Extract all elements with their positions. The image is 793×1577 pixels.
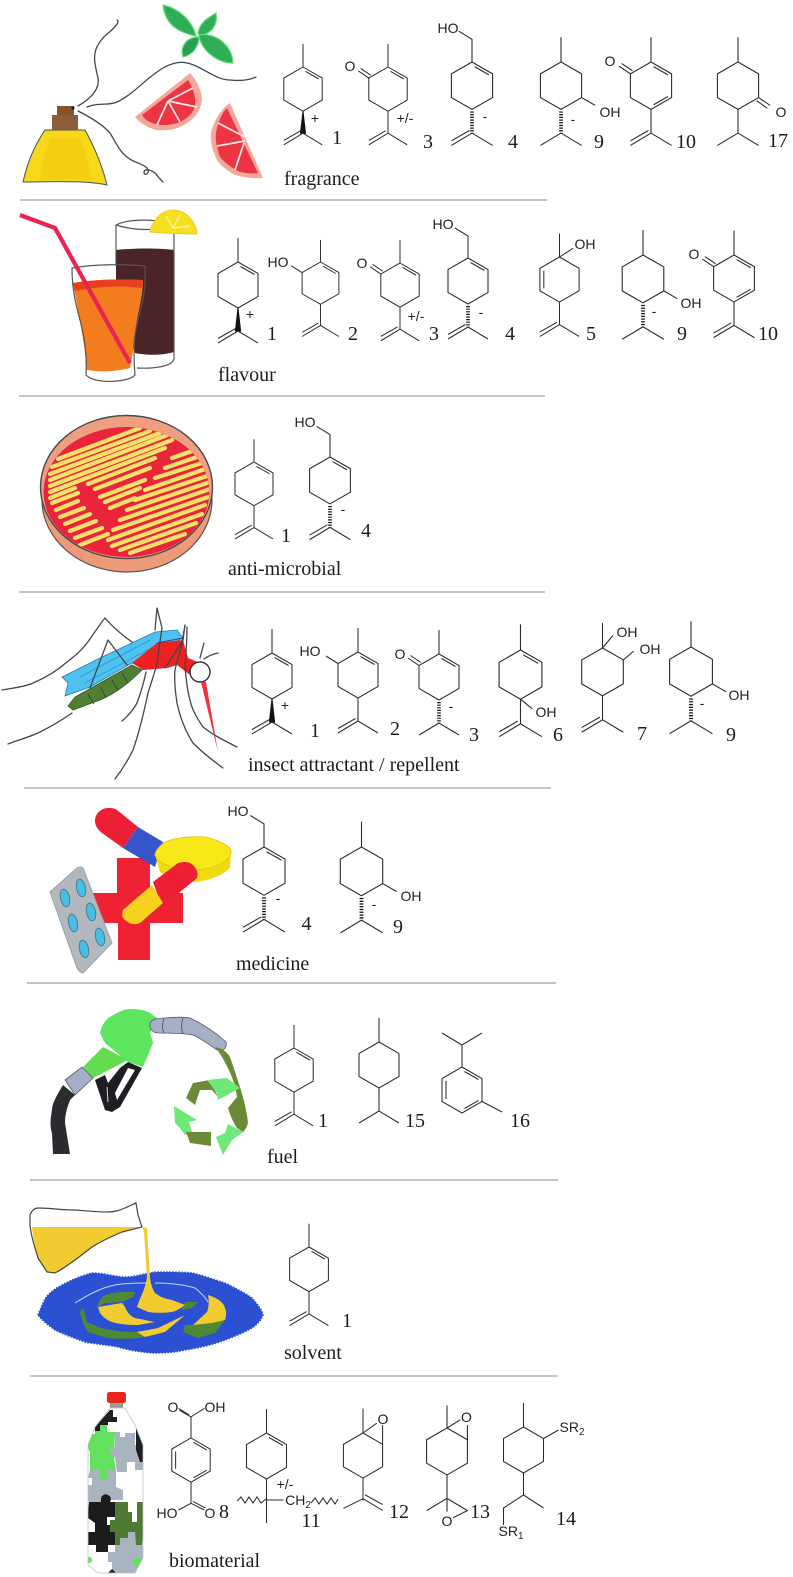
molecule 2: 2: [390, 718, 400, 740]
molecule 14: SR: [559, 1419, 579, 1435]
molecule 4: HO: [432, 216, 454, 232]
molecule 10: 10: [758, 323, 778, 345]
label: medicine: medicine: [236, 953, 309, 975]
molecule 3: [357, 240, 439, 345]
panel: solvent: [30, 1203, 352, 1364]
molecule 1: [235, 439, 291, 547]
molecule 1: 1: [281, 525, 291, 547]
molecule 16: 16: [510, 1110, 530, 1132]
molecule 6: 6: [553, 724, 563, 746]
molecule 10: [689, 231, 778, 345]
molecule 6: OH: [536, 704, 556, 720]
molecule 3: O: [395, 646, 406, 662]
icon: petri dish: [40, 416, 212, 572]
molecule 3: +/-: [397, 110, 414, 126]
molecule 14: [498, 1403, 585, 1542]
molecule 10: 10: [676, 131, 696, 153]
icon: mosquito: [2, 608, 237, 779]
molecule 4: 4: [508, 131, 518, 153]
molecule 4: HO: [228, 803, 249, 819]
molecule 8: O: [168, 1399, 179, 1415]
molecule 7: OH: [640, 641, 660, 657]
molecule 11: [237, 1409, 338, 1532]
molecule 4: HO: [294, 414, 316, 430]
molecule 3: O: [357, 255, 368, 271]
molecule 8: [156, 1399, 229, 1523]
molecule 1: +: [246, 306, 254, 322]
molecule 2: [300, 628, 400, 740]
molecule 6: [499, 624, 563, 746]
molecule 11: 11: [301, 1510, 321, 1532]
molecule 8: O: [205, 1505, 216, 1521]
molecule 4: [228, 803, 312, 935]
label: anti-microbial: anti-microbial: [228, 558, 342, 580]
molecule 9: OH: [728, 687, 750, 703]
molecule 9: [540, 37, 620, 153]
molecule 1: 1: [318, 1110, 328, 1132]
molecule 4: [438, 20, 518, 153]
icon: puzzle-piece plastic bottle: [88, 1392, 144, 1574]
panel: fuel: [50, 1009, 530, 1168]
molecule 5: [540, 233, 596, 345]
molecule 14: 2: [579, 1427, 585, 1438]
molecule 1: [275, 1025, 328, 1132]
label: insect attractant / repellent: insect attractant / repellent: [248, 754, 460, 776]
molecule 7: 7: [637, 723, 647, 745]
molecule 4: 4: [505, 323, 515, 345]
icon: drinks with straw and lemon: [20, 210, 197, 381]
label: fragrance: fragrance: [284, 168, 360, 190]
molecule 3: [345, 44, 433, 153]
molecule 4: [432, 216, 515, 345]
molecule 9: OH: [680, 295, 702, 311]
panel: biomaterial: [85, 1392, 585, 1577]
molecule 3: 3: [423, 131, 433, 153]
molecule 1: [218, 238, 277, 345]
label: biomaterial: biomaterial: [169, 1550, 261, 1572]
molecule 13: O: [442, 1513, 453, 1529]
molecule 13: [427, 1406, 490, 1529]
molecule 12: [343, 1408, 409, 1523]
molecule 9: -: [571, 111, 576, 127]
molecule 9: -: [700, 695, 705, 711]
molecule 4: 4: [361, 520, 371, 542]
molecule 1: [290, 1224, 352, 1332]
molecule 2: HO: [300, 643, 321, 659]
molecule 1: +: [311, 110, 319, 126]
molecule 3: 3: [469, 724, 479, 746]
molecule 13: O: [461, 1409, 472, 1425]
molecule 12: O: [378, 1411, 389, 1427]
molecule 9: -: [372, 896, 377, 912]
label: solvent: solvent: [284, 1342, 342, 1364]
molecule 3: 3: [429, 323, 439, 345]
molecule 9: 9: [677, 323, 687, 345]
molecule 1: +: [281, 697, 289, 713]
molecule 5: OH: [574, 236, 596, 252]
molecule 11: +/-: [277, 1476, 294, 1492]
molecule 12: 12: [389, 1501, 409, 1523]
molecule 10: O: [605, 53, 616, 69]
icon: perfume bottle with mint and grapefruit: [23, 5, 263, 185]
label: flavour: flavour: [218, 364, 276, 386]
panel: medicine: [50, 803, 422, 975]
panel: anti-microbial: [40, 414, 371, 580]
molecule 3: -: [449, 698, 454, 714]
molecule 9: [670, 621, 750, 746]
molecule 3: O: [345, 58, 356, 74]
molecule 17: [717, 37, 788, 152]
molecule 4: HO: [438, 20, 459, 36]
molecule 8: HO: [156, 1505, 178, 1521]
molecule 8: 8: [219, 1501, 229, 1523]
molecule 9: OH: [400, 888, 422, 904]
molecule 3: [395, 630, 479, 746]
molecule 15: 15: [405, 1110, 425, 1132]
molecule 11: CH: [285, 1492, 305, 1508]
molecule 14: 1: [518, 1531, 524, 1542]
molecule 14: 14: [556, 1508, 576, 1530]
molecule 1: 1: [332, 127, 342, 149]
molecule 10: [605, 37, 696, 153]
icon: flask pouring into puddle: [30, 1203, 263, 1353]
molecule 16: [442, 1033, 530, 1132]
molecule 4: -: [483, 108, 488, 124]
molecule 1: [284, 44, 342, 149]
molecule 8: OH: [204, 1399, 226, 1415]
molecule 4: -: [479, 304, 484, 320]
panel: fragrance: [23, 5, 788, 190]
molecule 9: OH: [600, 104, 620, 120]
molecule 15: [359, 1018, 425, 1132]
molecule 2: HO: [268, 254, 289, 270]
molecule 7: OH: [616, 624, 638, 640]
molecule 4: [294, 414, 371, 542]
molecule 1: [252, 629, 320, 742]
icon: fuel nozzle with recycling symbol: [50, 1009, 248, 1155]
icon: pills and red cross: [50, 808, 231, 973]
molecule 1: 1: [267, 323, 277, 345]
molecule 4: -: [341, 501, 346, 517]
molecule 13: 13: [470, 1501, 490, 1523]
molecule 1: 1: [342, 1310, 352, 1332]
molecule 9: -: [652, 303, 657, 319]
molecule 9: [340, 822, 422, 938]
panel: flavour: [20, 210, 778, 386]
molecule 17: O: [776, 104, 787, 120]
molecule 9: 9: [726, 724, 736, 746]
molecule 3: +/-: [408, 308, 425, 324]
molecule 9: 9: [393, 916, 403, 938]
panel: insect attractant / repellent: [2, 608, 750, 779]
molecule 17: 17: [768, 130, 788, 152]
molecule 9: 9: [594, 131, 604, 153]
molecule 2: 2: [348, 323, 358, 345]
molecule 4: 4: [302, 913, 312, 935]
molecule 9: [622, 230, 702, 345]
molecule 11: 2: [305, 1500, 311, 1511]
molecule 2: [268, 240, 358, 345]
molecule 1: 1: [310, 720, 320, 742]
molecule 10: O: [689, 246, 700, 262]
molecule 14: SR: [498, 1523, 518, 1539]
molecule 4: -: [276, 890, 281, 906]
label: fuel: fuel: [267, 1146, 299, 1168]
molecule 7: [582, 623, 660, 745]
molecule 5: 5: [586, 323, 596, 345]
